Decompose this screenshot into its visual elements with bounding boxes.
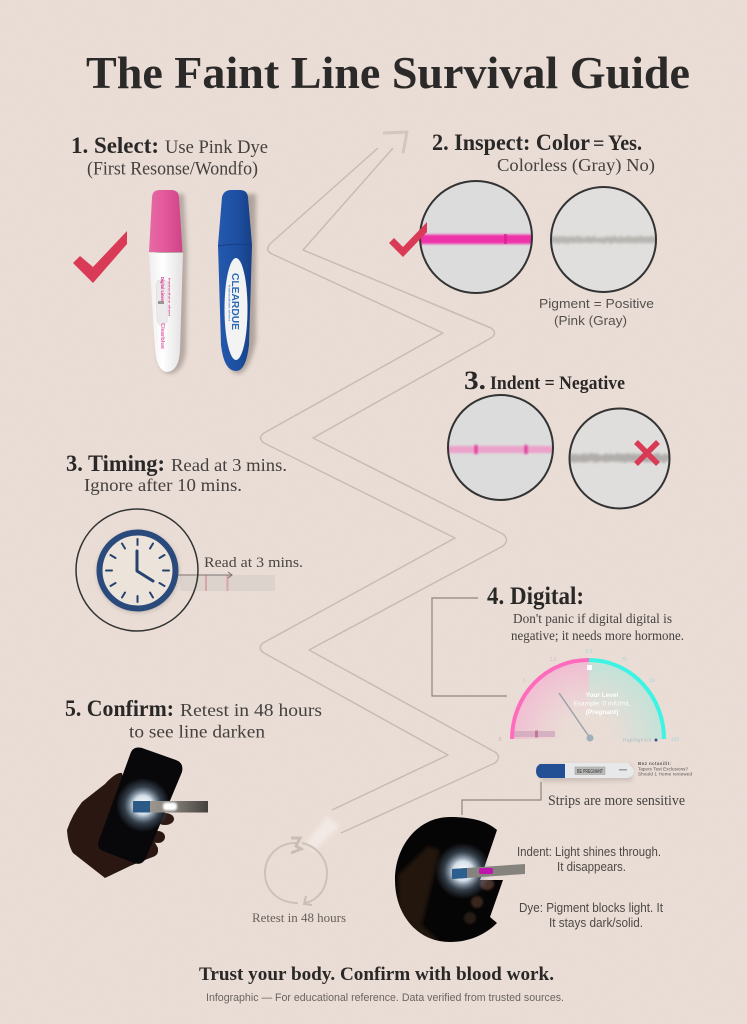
- connector bracket to gauge: [432, 598, 507, 696]
- hormone gauge chart: Example: 0 mIU/mL: [573, 700, 631, 708]
- timing strip with arrow and label: Read at 3 mins.: [204, 555, 303, 571]
- heading: indent equals negative: Indent = Negative: [490, 373, 625, 394]
- heading: step 5 confirm: 5. Confirm:: [65, 696, 174, 721]
- retest cycle arrows: Retest in 48 hours: [252, 910, 346, 925]
- heading: step 2 inspect: 2. Inspect: Color: [432, 130, 590, 155]
- heading: step 1 select: (First Resonse/Wondfo): [87, 160, 258, 180]
- pink dye pregnancy test: Instructions sheet: [168, 278, 172, 316]
- connector from digital test to phone circle: [462, 782, 541, 815]
- heading: step 2 inspect: [432, 130, 655, 176]
- hand holding phone with test strip: [67, 748, 208, 878]
- heading: step 3 timing: Ignore after 10 mins.: [84, 475, 242, 495]
- blue dye pregnancy test: [218, 190, 256, 374]
- hormone gauge chart: 5: [523, 678, 526, 684]
- digital pregnancy test: BE PREGNANT: [577, 769, 603, 775]
- footer: [199, 965, 564, 1004]
- heading: indent equals negative: [464, 366, 625, 395]
- blue dye pregnancy test: CLEARDUE: [229, 273, 240, 330]
- pink dye pregnancy test: Clearblue: [159, 323, 165, 349]
- explanation: indent and dye: Indent: Light shines through.: [517, 845, 661, 859]
- caption: pigment equals positive: Pigment = Positive: [539, 296, 654, 311]
- heading: step 3 timing: [66, 451, 287, 495]
- hormone gauge chart: [499, 649, 679, 743]
- hormone gauge chart: Your Level: [586, 692, 619, 699]
- heading: indent equals negative: 3.: [464, 366, 486, 395]
- caption: pigment equals positive: (Pink (Gray): [554, 313, 627, 328]
- pink dye pregnancy test: [149, 190, 187, 374]
- caption: pigment equals positive: [539, 296, 654, 328]
- icon: red check mark: [73, 231, 127, 283]
- magnified circle: indent line: [446, 395, 556, 500]
- explanation: indent and dye: [517, 845, 663, 930]
- heading: step 5 confirm: [65, 696, 322, 742]
- magnified circle: pink dye line: [418, 181, 534, 293]
- explanation: indent and dye: It stays dark/solid.: [549, 916, 643, 930]
- hormone gauge chart: 0.5: [586, 649, 593, 655]
- explanation: indent and dye: Dye: Pigment blocks light. It: [519, 901, 663, 915]
- hormone gauge chart: Highlighted: [623, 738, 651, 742]
- footer: Infographic — For educational reference. Data verified from trusted sources.: [206, 992, 564, 1004]
- dark circle: phone light test: [395, 817, 525, 942]
- timing strip with arrow and label: [178, 555, 303, 591]
- heading: step 1 select: [71, 133, 268, 180]
- hormone gauge chart: (Pregnant): [586, 709, 618, 716]
- hormone gauge chart: 75: [621, 657, 627, 663]
- title: The Faint Line Survival Guide: [86, 47, 690, 98]
- hormone gauge chart: 0: [499, 737, 502, 743]
- hormone gauge chart: 2.5: [550, 657, 557, 663]
- blue dye pregnancy test: Instructions sheet: [228, 285, 232, 321]
- heading: step 1 select: Use Pink Dye: [165, 137, 268, 158]
- heading: step 2 inspect: Colorless (Gray) No): [497, 155, 655, 176]
- zigzag path arrow: [260, 132, 506, 833]
- heading: step 1 select: 1. Select:: [71, 133, 159, 158]
- pink dye pregnancy test: Digital Lines: [160, 277, 165, 301]
- heading: step 2 inspect: Yes.: [608, 130, 642, 155]
- heading: step 4 digital: 4. Digital:: [487, 583, 584, 610]
- hormone gauge chart: 100: [671, 737, 679, 743]
- caption: strips more sensitive: Strips are more sensitive: [548, 793, 685, 809]
- digital pregnancy test: Tapers Test Exclusions?: [638, 766, 688, 772]
- magnified circle: gray indent with red cross: [566, 408, 672, 508]
- heading: step 4 digital: [487, 583, 684, 643]
- digital pregnancy test: Should 1 Home reviewed: [638, 772, 692, 776]
- magnified circle: gray line: [548, 187, 660, 292]
- heading: step 3 timing: Read at 3 mins.: [171, 455, 287, 475]
- clock icon: [76, 509, 198, 631]
- heading: step 5 confirm: to see line darken: [129, 722, 265, 742]
- retest cycle arrows: [252, 816, 346, 925]
- heading: step 4 digital: negative; it needs more hormone.: [511, 628, 684, 643]
- digital pregnancy test: [536, 761, 692, 782]
- footer: Trust your body. Confirm with blood work.: [199, 965, 554, 985]
- heading: step 4 digital: Don't panic if digital digital is: [513, 611, 672, 626]
- heading: step 2 inspect: =: [593, 133, 604, 155]
- icon: small red check mark: [389, 222, 427, 257]
- digital pregnancy test: Bnz nctasilit:: [638, 761, 672, 766]
- heading: step 5 confirm: Retest in 48 hours: [180, 700, 322, 720]
- hormone gauge chart: 10: [649, 678, 655, 684]
- explanation: indent and dye: It disappears.: [557, 860, 626, 874]
- infographic canvas: [66, 56, 692, 1004]
- heading: step 3 timing: 3. Timing:: [66, 451, 165, 476]
